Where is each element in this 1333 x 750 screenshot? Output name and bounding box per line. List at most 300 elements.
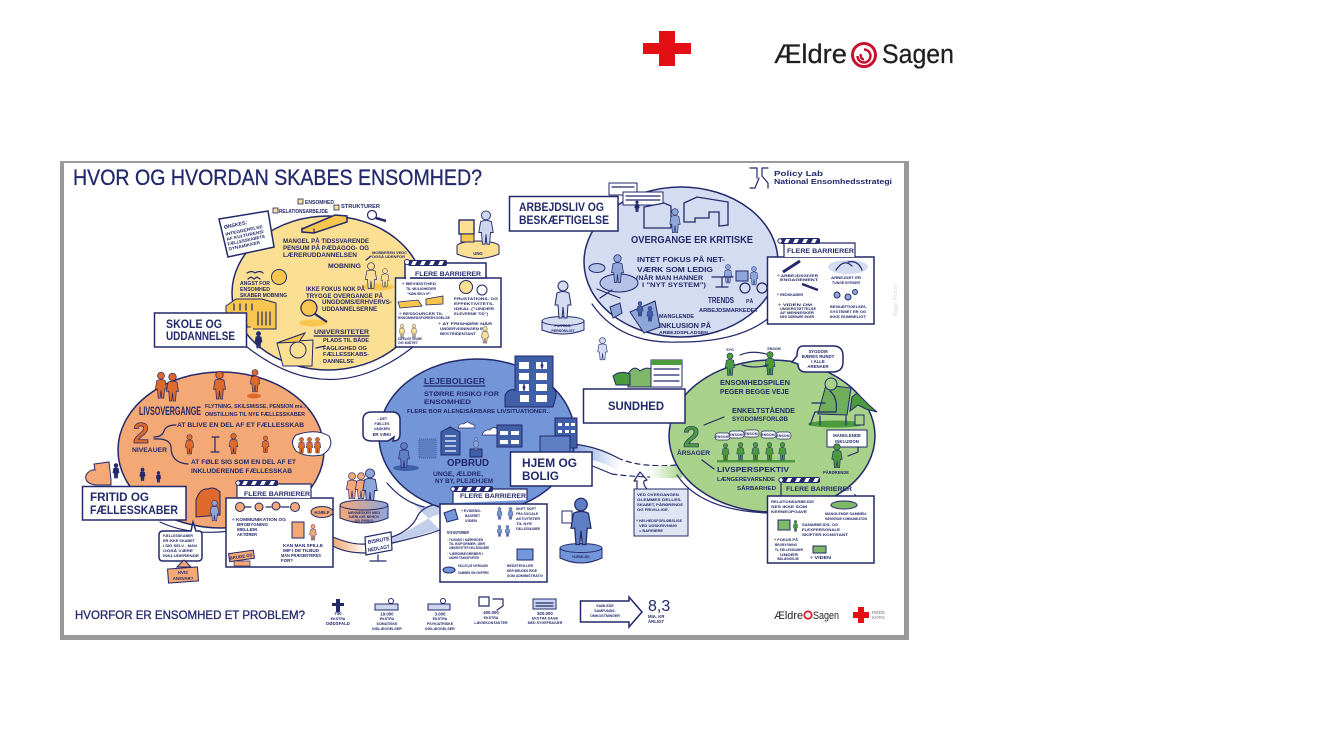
text: trygge overgange: UDDANNELSERNE	[322, 306, 378, 313]
statue: ung: UNG	[473, 251, 483, 256]
logo: Ældre Sagen	[774, 39, 954, 69]
number: 2 niveauer: NIVEAUER	[132, 447, 167, 454]
barriers: sundhed: SKIFTER KONSTANT	[802, 533, 849, 537]
stat: 8,3 mia kr	[648, 598, 670, 624]
barriers: skole: ÷ AT FRISHØRE NÅR	[438, 321, 493, 326]
icon: group of people	[196, 488, 220, 521]
icons: five ensom people: ENSOM	[729, 433, 743, 437]
barriers: arbejdsliv: UNDERSTØTTELSE	[780, 307, 817, 311]
barriers: hjem: VIDEN	[465, 519, 477, 523]
text: angst for ensomhed	[240, 270, 287, 299]
barriers: skole: IDEAL ("UNDER	[454, 307, 495, 311]
barriers: hjem: DER BRUGES RIGE	[507, 569, 538, 573]
icon: book	[302, 215, 347, 233]
note: ved overgangen	[634, 472, 688, 536]
stat: 820.000 sygefravær: 820.000	[537, 611, 553, 616]
tags: ENSOMHED	[305, 200, 334, 206]
blue wave to note	[566, 443, 682, 478]
Policy Lab credit	[750, 168, 892, 188]
panel: sundhed	[584, 346, 877, 563]
statue: hjemløs: HJEMLØS	[572, 555, 590, 559]
text: opbrud: OPBRUD	[447, 458, 489, 469]
barriers: skole: ENSOMHEDSFOREBYGGELSE	[398, 316, 451, 320]
heading box: skole og uddannelse	[154, 313, 246, 347]
text: opbrud: UNGE, ÆLDRE,	[433, 471, 483, 478]
icon: student	[255, 331, 262, 348]
text: lejeboliger: LEJEBOLIGER	[424, 377, 485, 386]
barriers: sundhed	[768, 477, 874, 563]
panel: fritid og fællesskaber	[75, 346, 885, 631]
text: opbrud: NY BY, PLEJEHJEM	[435, 478, 493, 485]
sign: hvis ansvar: HVIS	[178, 570, 188, 575]
icons: people and buildings	[393, 418, 577, 471]
barriers: hjem: BEDSTEHLLER	[507, 564, 533, 568]
stat: 400.000 lægekontakter: LÆGEKONTAKTER	[474, 621, 508, 625]
stat: 400.000 lægekontakter: EKSTRA	[484, 616, 499, 620]
text: universiteter	[314, 329, 370, 365]
icons: gate and people	[86, 462, 161, 485]
text: universiteter: UNIVERSITETER	[314, 329, 369, 336]
title: HVOR OG HVORDAN SKABES ENSOMHED?	[73, 165, 482, 190]
barriers: skole: UNDERVISNINGEN ER	[440, 327, 486, 331]
barriers: hjem: SAMMEN OM CHIFFRE!	[458, 571, 489, 575]
stat: 19.000 somatiske: EKSTRA	[380, 617, 395, 621]
barriers: hjem: FÆLLES (DE OVERGANGE	[458, 564, 488, 568]
note: ved overgangen: SKABET, PÅRØRENDE	[637, 502, 684, 507]
barriers: arbejdsliv: ÷ REDSKABER	[777, 293, 803, 297]
note: ønskes: FÆLLESSKABETS	[227, 234, 265, 247]
text: manglende inklusion: MANGLENDE	[659, 314, 695, 320]
sign: bisrute nedlagt: NEDLAGT	[367, 544, 391, 554]
text: at føle sig	[191, 459, 296, 475]
barriers: skole: OG MISTET	[398, 341, 419, 345]
stat: 8,3 mia kr: ÅRLIGT	[648, 619, 664, 624]
text: mangel på pensum	[283, 236, 370, 259]
barriers: hjem: · TILBUDS I NÆRHEDEN	[447, 538, 483, 542]
arrow: samlede samfundsomkostninger	[580, 597, 642, 627]
text: mangel på pensum: PENSUM PÅ PÆDAGOG- OG	[283, 243, 369, 252]
number: 2 niveauer	[132, 418, 167, 454]
note: ønskes: INTEGRERELSE	[225, 224, 263, 237]
note: ønskes: AF KULTURENS/	[226, 229, 265, 242]
stat: 3.000 psykiatriske	[425, 598, 455, 631]
statue: mennesker med særlige behov	[340, 469, 388, 523]
barriers: skole: SÆRLIGE SKABE	[398, 337, 422, 341]
barriers: skole: BESTRIDENTANT	[440, 332, 477, 336]
text: lejeboliger: STØRRE RISIKO FOR	[424, 391, 499, 398]
sign: bisrute nedlagt	[365, 532, 392, 561]
text: manglende inklusion: ARBEJDSPLADSEN	[659, 330, 708, 335]
tags	[273, 199, 380, 215]
stat: 8,3 mia kr: 8,3	[648, 598, 670, 615]
stat: 19.000 somatiske	[372, 598, 402, 631]
text: mobning: MOBNING	[328, 263, 361, 270]
statue: fortidspersonlighed: PERSONLIGT	[551, 329, 575, 333]
note: ønskes: DYNAMIKKER	[228, 240, 261, 251]
barriers: sundhed: UNDER	[780, 553, 799, 557]
text: trends: PÅ	[746, 298, 753, 305]
barriers: skole: TIL MULIGHEDER	[406, 287, 436, 291]
barriers: fritid	[226, 480, 333, 567]
heading box: fritid: FÆLLESSKABER	[90, 505, 179, 517]
barriers: fritid: ÷ KOMMUNIKATION OG	[232, 517, 287, 522]
barriers: sundhed: BROBYGNING	[775, 543, 797, 547]
heading box: skole og uddannelse: SKOLE OG	[166, 319, 222, 331]
note: ved overgangen: VED OVERGANGEN	[637, 493, 679, 497]
text: lejeboliger: FLERE BOR ALENE/SÅRBARE LIVSITUATIONER..	[407, 408, 551, 415]
note: ved overgangen: GLEMMES DELLES-	[637, 498, 683, 502]
barriers: arbejdsliv: ÷ ARBEJDSGIVER	[777, 274, 819, 278]
text: trends: TRENDS	[708, 296, 735, 305]
barriers: arbejdsliv: FLERE BARRIERER	[787, 248, 854, 255]
barriers: sundhed: SES IKKE SOM	[771, 505, 807, 509]
barriers: hjem: FRA SOCIALE	[516, 512, 539, 516]
arrow: samlede samfundsomkostninger: SAMFUNDS-	[594, 609, 617, 613]
Policy Lab credit: National Ensomhedsstrategi	[774, 177, 892, 186]
speech bubble: fælles vaskeri: VASKERI	[374, 427, 390, 431]
barriers: fritid: BRUGE OS	[229, 552, 253, 561]
callout: manglende inklusion: MANGLENDE	[833, 433, 861, 438]
panel: skole og uddannelse	[154, 199, 501, 380]
text: intet fokus	[636, 255, 726, 289]
barriers: hjem: TIL NYE	[516, 522, 533, 526]
text: livsovergange: LIVSOVERGANGE	[139, 406, 201, 418]
icon: person on pedestal	[589, 255, 638, 292]
footer logo: Ældre Sagen: Ældre	[774, 610, 803, 622]
text: trends	[699, 296, 759, 314]
text: livsovergange	[139, 404, 306, 418]
barriers: skole: FLERE BARRIERER	[415, 271, 481, 278]
stat: 19.000 somatiske: SOMATISKE	[376, 622, 398, 626]
heading box: hjem og bolig: HJEM OG	[522, 458, 577, 470]
barriers: sundhed: TIL FÆLLESSKABER	[775, 548, 803, 552]
icons: five ensom people: ENSOM	[761, 433, 775, 437]
text: manglende inklusion: INKLUSION PÅ	[659, 321, 711, 330]
sign: hvis ansvar: ANSVAR?	[173, 576, 194, 581]
stat: 3.000 psykiatriske: EKSTRA	[433, 617, 448, 621]
icon: falling person	[598, 338, 607, 360]
barriers: arbejdsliv: TUNGE BYRDER	[832, 281, 860, 285]
text: livsovergange: OMSTILLING TIL NYE FÆLLESSKABER	[205, 412, 305, 418]
number: 2 årsager: ÅRSAGER	[677, 448, 710, 457]
barriers: sundhed: RELATIONSARBEJDE	[771, 500, 815, 504]
stat: 700 dødsfald: EKSTRA	[331, 617, 346, 621]
icons: sport figures	[185, 432, 331, 456]
heading box: sundhed: SUNDHED	[608, 401, 664, 413]
icon: apartment tower	[505, 356, 556, 407]
speech bubble: sygdom bæres rundt: BÆRES RUNDT	[802, 354, 835, 359]
logo: Ældre Sagen: Sagen	[882, 39, 954, 69]
text: livsperspektiv: LÆNGEREVARENDE	[717, 477, 776, 483]
watermark: Bigger Picture	[893, 284, 899, 316]
callout: manglende inklusion: PÅRØRENDE	[823, 470, 849, 475]
statue: fortidspersonlighed: FORTIDS-	[555, 324, 572, 328]
statue: mennesker med særlige behov: SÆRLIGE BEHOV	[349, 515, 380, 519]
barriers: hjem: NYE BOFORMER	[447, 530, 470, 535]
barriers: sundhed: MANGLENDE SAMMEN-	[825, 512, 868, 516]
stat: 3.000 psykiatriske: 3.000	[435, 612, 446, 616]
stat: 700 dødsfald: 700	[334, 611, 342, 616]
text: universiteter: FAGLIGHED OG	[323, 346, 367, 352]
stat: 700 dødsfald	[326, 599, 350, 626]
barriers: sundhed: ÷ VIDEN	[810, 555, 831, 560]
barriers: skole: ÷ BEVIDSTHED	[402, 282, 437, 286]
speech bubble: fælles vaskeri: ER VÆK!	[373, 432, 392, 437]
barriers: hjem: SOM ADMINISTRATIV	[507, 574, 544, 578]
stat: 820.000 sygefravær: MED SYGEFRAVÆR	[528, 621, 563, 625]
text: livsperspektiv	[717, 465, 789, 492]
text: ensomhedspilen	[720, 378, 790, 396]
number: 2 årsager: 2	[683, 421, 700, 454]
barriers: skole: FRUSTATIONS- OG	[454, 297, 498, 301]
barriers: arbejdsliv: AF MENNESKER	[780, 311, 814, 315]
icon: office buildings	[635, 197, 728, 233]
heading box: fritid	[82, 486, 186, 520]
icons: five ensom people: ENSOM	[744, 432, 758, 436]
barriers: hjem	[440, 486, 547, 582]
note: ved overgangen: = BARRIERE	[639, 529, 664, 533]
stat: 700 dødsfald: DØDSFALD	[326, 621, 350, 626]
text: overgange: OVERGANGE ER KRITISKE	[631, 235, 753, 246]
barriers: arbejdsliv: SYSTEMET ER OG	[830, 310, 866, 314]
barriers: hjem: · VÆRDIBEGREBER I	[447, 552, 483, 556]
footer logo: Røde Kors	[853, 607, 885, 623]
stat: 19.000 somatiske: INDLÆGGELSER	[372, 627, 402, 631]
text: trygge overgange	[299, 284, 392, 326]
statue: mennesker med særlige behov: OG RISIKO	[355, 519, 374, 523]
text: angst for ensomhed: ANGST FOR	[240, 281, 270, 287]
barriers: skole: EFFEKTIVITETS-	[454, 302, 495, 306]
text: trygge overgange: TRYGGE OVERGANGE PÅ	[306, 291, 383, 300]
footer logo: Ældre Sagen: Sagen	[813, 610, 839, 622]
barriers: hjem: BASERET	[465, 514, 481, 518]
barriers: sundhed: KERNEOPGAVE	[771, 510, 808, 514]
text: enkeltstående: ENKELTSTÅENDE	[732, 406, 795, 415]
text: livsperspektiv: LIVSPERSPEKTIV	[717, 465, 789, 474]
barriers: hjem: AKTIVITETER	[516, 517, 540, 521]
barriers: arbejdsliv	[768, 238, 874, 324]
text: at føle sig: AT FØLE SIG SOM EN DEL AF ET	[191, 459, 296, 466]
text: manglende inklusion	[659, 314, 711, 335]
text: livsovergange: FLYTNING, SKILSMISSE, PENSION mv..	[205, 404, 306, 410]
text: lejeboliger	[407, 377, 551, 415]
icon: graduate	[277, 333, 313, 366]
arrow: samlede samfundsomkostninger: OMKOSTNINGER	[590, 614, 620, 618]
statue: fortidspersonlighed	[542, 281, 584, 334]
barriers: sundhed: HÆNGENDE KOMMUNIKATION	[825, 517, 867, 521]
infographic frame	[60, 161, 909, 640]
barriers: fritid: MELLEM	[237, 527, 257, 532]
barriers: fritid: FOR?	[281, 558, 293, 563]
barriers: fritid: HJÆLP	[314, 510, 330, 515]
arrow: samlede samfundsomkostninger: SAMLEDE	[596, 604, 614, 608]
text: intet fokus: I "NYT SYSTEM")	[642, 282, 706, 289]
text: mangel på pensum: MANGEL PÅ TIDSSVARENDE	[283, 236, 370, 245]
panel: hjem og bolig	[363, 356, 682, 582]
text: mobning: OGSÅ UDENFOR	[372, 254, 405, 259]
text: mobning: MOBBEREN VEDC	[372, 251, 407, 255]
text: mangel på pensum: LÆRERUDDANNELSEN	[283, 252, 357, 259]
barriers: hjem: ANDRE TRANSPORTER	[449, 556, 479, 560]
text: at blive en del: AT BLIVE EN DEL AF ET FÆLLESSKAB	[177, 422, 304, 429]
icon: man in chair with plant	[808, 378, 877, 428]
statue: hjemløs	[560, 498, 602, 563]
text: lejeboliger: ENSOMHED	[424, 399, 471, 406]
number: 2 årsager	[677, 421, 714, 469]
icon: magnifier	[368, 210, 386, 221]
Policy Lab credit: Policy Lab	[774, 169, 824, 178]
icons: five ensom people	[715, 430, 795, 462]
barriers: hjem: ÷ EVIDENS-	[461, 509, 482, 513]
text: universiteter: PLADS TIL BÅDE	[323, 337, 370, 344]
speech bubble: fælles vaskeri: FÆLLES	[375, 422, 390, 426]
barriers: fritid: MIF I DE TILBUD	[283, 548, 319, 553]
stat: 3.000 psykiatriske: PSYKIATRISKE	[427, 622, 454, 626]
icons: syg og ensom: ENSOM	[767, 347, 781, 351]
text: universiteter: FÆLLESSKABS-	[323, 352, 369, 358]
barriers: skole	[396, 260, 501, 347]
barriers: arbejdsliv: BESKÆFTIGELSES-	[830, 305, 868, 309]
logo: Ældre Sagen: Ældre	[774, 39, 847, 69]
tags: STRUKTURER	[341, 204, 380, 210]
icons: hospital and ambulance	[613, 360, 682, 387]
speech bubble: sygdom bæres rundt: ARENAER	[807, 364, 830, 369]
barriers: arbejdsliv: ENGAGEMENT	[780, 278, 819, 282]
heading box: hjem og bolig	[510, 452, 592, 486]
speech bubble: fælles vaskeri: ...DET	[377, 417, 388, 421]
barriers: fritid: FLERE BARRIERER	[244, 491, 310, 498]
icons: five ensom people: ENSOM	[776, 434, 790, 438]
arrows	[154, 425, 188, 464]
sign: bisrute nedlagt: BISRUTE	[367, 536, 391, 546]
barriers: sundhed: FLERE BARRIERER	[786, 486, 852, 493]
heading box: arbejdsliv: BESKÆFTIGELSE	[519, 215, 609, 227]
barriers: fritid: MAN PRÆSENTERES	[281, 553, 321, 558]
note: ønskes	[219, 211, 274, 257]
tags: RELATIONSARBEJDE	[279, 209, 328, 215]
footer logo: Ældre Sagen	[774, 610, 839, 622]
barriers: sundhed: ÷ FOKUS PÅ	[774, 537, 798, 542]
note: ønskes: ØNSKES:	[223, 220, 248, 231]
speech bubble: fællesskaber: OGSÅ VÆRE	[163, 548, 194, 553]
heading box: hjem og bolig: BOLIG	[522, 471, 559, 483]
barriers: hjem: SKIFT SKIFT	[516, 507, 537, 511]
text: opbrud	[433, 458, 493, 485]
barriers: hjem: UNDERSTØTTER FÆLLESSKABER	[449, 546, 489, 550]
barriers: sundhed: FLEXPERSONALE	[802, 528, 841, 532]
icons: syg og ensom	[725, 347, 781, 375]
panel: arbejdsliv og beskæftigelse	[510, 183, 874, 342]
text: livsperspektiv: SÅRBARHED	[737, 485, 776, 492]
heading box: sundhed	[584, 389, 685, 423]
icon: school building	[226, 299, 276, 329]
stat: 19.000 somatiske: 19.000	[380, 612, 394, 616]
text: mobning	[328, 251, 407, 290]
icon: delivery bike	[712, 264, 767, 293]
text: at føle sig: INKLUDERENDE FÆLLESSKAB	[191, 468, 292, 475]
text: angst for ensomhed: ENSOMHED	[240, 287, 270, 293]
statue: mennesker med særlige behov: MENNESKER MED	[348, 511, 380, 515]
text: universiteter: DANNELSE	[323, 359, 355, 365]
text: enkeltstående: SYGDOMSFORLØB	[732, 416, 788, 423]
footer heading: HVORFOR ER ENSOMHED ET PROBLEM?	[75, 608, 305, 622]
footer logo: Røde Kors: KORS	[872, 615, 885, 620]
callout: manglende inklusion	[823, 430, 867, 475]
sign: hvis ansvar	[168, 560, 198, 583]
footer logo: Røde Kors: RØDE	[872, 610, 885, 615]
barriers: arbejdsliv: IKKE RUMMELIGT	[830, 315, 867, 319]
icons: syg og ensom: SYG	[726, 348, 734, 352]
speech bubble: fælles vaskeri	[363, 412, 400, 441]
icons: five ensom people: ENSOM	[715, 435, 729, 439]
heading box: skole og uddannelse: UDDANNELSE	[166, 331, 235, 343]
stat: 820.000 sygefravær: EKSTRA DAGE	[532, 616, 559, 620]
callout: manglende inklusion: INKLUSION	[835, 439, 859, 444]
text: angst for ensomhed: SKABER MOBNING	[240, 293, 287, 299]
text: intet fokus: INTET FOKUS PÅ NET-	[637, 255, 726, 264]
barriers: fritid: AKTØRER	[237, 532, 258, 537]
speech bubble: sygdom bæres rundt	[792, 346, 843, 372]
stat: 8,3 mia kr: MIA. KR	[648, 614, 665, 619]
speech bubble: fællesskaber: I SIG SELV - MAN	[163, 544, 197, 548]
heading box: arbejdsliv	[510, 196, 618, 231]
stat: 400.000 lægekontakter	[474, 597, 508, 625]
barriers: hjem: FLERE BARRIERER	[460, 493, 526, 500]
icon: factory	[609, 183, 663, 205]
barriers: sundhed: INDLÆGGELSE	[777, 557, 799, 561]
note: ved overgangen: OG FRIVILLIGE.	[637, 508, 669, 512]
barriers: arbejdsliv: ARBEJDET ER	[831, 276, 861, 280]
barriers: hjem: FÆLLESSKABER	[516, 527, 540, 531]
text: trends: ARBEJDSMARKEDET	[699, 308, 759, 314]
icons: people on top	[155, 370, 261, 401]
barriers: sundhed: SAMARBEJDS- OG	[802, 523, 838, 527]
speech bubble: fællesskaber: ER IKKE SKABET	[163, 539, 196, 543]
heading box: fritid: FRITID OG	[90, 492, 149, 504]
speech bubble: sygdom bæres rundt: I ALLE	[811, 359, 825, 364]
barriers: fritid: KAN MAN SPILLE	[283, 543, 323, 548]
note: ved overgangen: ÷ HELHEDSFORLØBSLISE	[636, 519, 683, 523]
number: 2 niveauer: 2	[133, 418, 149, 450]
speech bubble: fællesskaber: FÆLLESSKABER	[163, 534, 193, 538]
icon: people at workplace	[597, 289, 660, 333]
barriers: arbejdsliv: ÷ VIDEN OM	[778, 303, 812, 307]
logo: Røde Kors red cross	[643, 31, 691, 66]
stat: 3.000 psykiatriske: INDLÆGGELSER	[425, 627, 455, 631]
stat: 400.000 lægekontakter: 400.000	[483, 610, 499, 615]
barriers: skole: "KØN SELV IF"	[407, 292, 431, 296]
barriers: hjem: TIL BOFORMER, DER	[449, 542, 485, 546]
heading box: arbejdsliv: ARBEJDSLIV OG	[519, 202, 604, 214]
barriers: skole: ÷ RESSOURCER TIL	[399, 312, 444, 316]
barriers: skole: ELEVERNE TID")	[454, 312, 489, 316]
text: intet fokus: (NÅR MAN HANNER	[636, 273, 703, 282]
barriers: arbejdsliv: MED SÅRBARE SIDER	[780, 314, 814, 319]
statue: ung	[457, 211, 499, 258]
text: intet fokus: VÆRK SOM LEDIG	[637, 265, 713, 274]
speech bubble: fællesskaber	[159, 522, 202, 561]
speech bubble: sygdom bæres rundt: SYGDOM	[808, 349, 828, 354]
text: ensomhedspilen: PEGER BEGGE VEJE	[720, 387, 789, 396]
text: trygge overgange: UNGDOMS/ERHVERVS-	[322, 299, 392, 306]
text: trygge overgange: IKKE FOKUS NOK PÅ	[306, 284, 365, 293]
stat: 820.000 sygefravær	[528, 599, 563, 625]
note: ved overgangen: VED UDSKRIVNING	[639, 524, 677, 528]
text: enkeltstående	[704, 406, 795, 425]
speech bubble: fællesskaber: INKLUDERENDE	[163, 554, 200, 558]
barriers: fritid: BROBYGNING	[237, 522, 269, 527]
text: ensomhedspilen: ENSOMHEDSPILEN	[720, 378, 790, 387]
